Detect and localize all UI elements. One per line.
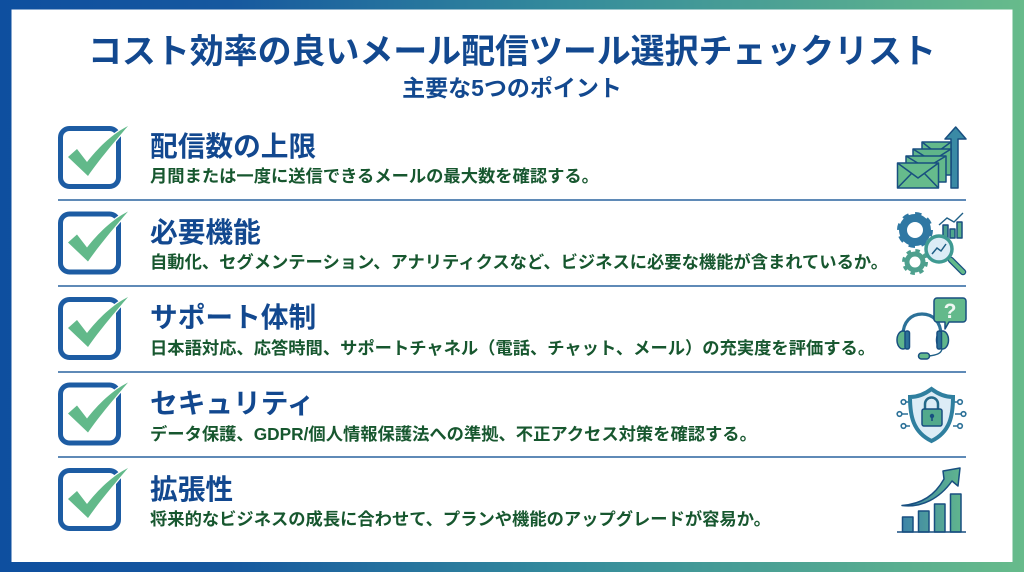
panel: 配信数の上限 [60, 126, 966, 188]
description: 自動化、セグメンテーション、アナリティクスなど、ビジネスに必要な機能が含まれているか。 [150, 252, 888, 272]
heading: 必要機能 [150, 217, 261, 248]
icon: checkbox 4 [60, 382, 128, 443]
heading: 拡張性 [150, 474, 233, 505]
divider 1 [58, 199, 966, 201]
icon: checkbox 2 [60, 212, 128, 272]
panel: サポート体制 [60, 297, 966, 359]
heading: セキュリティ [150, 388, 314, 419]
icon: headset with question bubble [897, 298, 966, 359]
divider 4 [58, 456, 966, 458]
description: 日本語対応、応答時間、サポートチャネル（電話、チャット、メール）の充実度を評価する。 [150, 338, 875, 358]
heading: サポート体制 [150, 302, 316, 333]
icon: shield with padlock [897, 389, 966, 441]
icon: growth chart with arrow [897, 468, 966, 532]
panel: セキュリティ [60, 382, 966, 444]
panel: 必要機能 [60, 212, 963, 273]
icon: checkbox 5 [60, 468, 128, 528]
icon: checkbox 3 [60, 297, 128, 358]
description: 月間または一度に送信できるメールの最大数を確認する。 [150, 166, 599, 186]
divider 2 [58, 285, 966, 287]
divider 3 [58, 371, 966, 373]
subtitle: 主要な5つのポイント [402, 75, 622, 101]
heading: 配信数の上限 [150, 131, 316, 162]
icon: envelopes with up arrow [898, 127, 966, 188]
description: 将来的なビジネスの成長に合わせて、プランや機能のアップグレードが容易か。 [150, 509, 771, 529]
panel: 拡張性 [60, 468, 966, 532]
icon: gears, chart and magnifier [900, 213, 963, 273]
description: データ保護、GDPR/個人情報保護法への準拠、不正アクセス対策を確認する。 [150, 424, 757, 444]
icon: headset with question bubble: ? [944, 300, 956, 323]
icon: checkbox 1 [60, 126, 128, 186]
title: コスト効率の良いメール配信ツール選択チェックリスト [88, 33, 936, 71]
